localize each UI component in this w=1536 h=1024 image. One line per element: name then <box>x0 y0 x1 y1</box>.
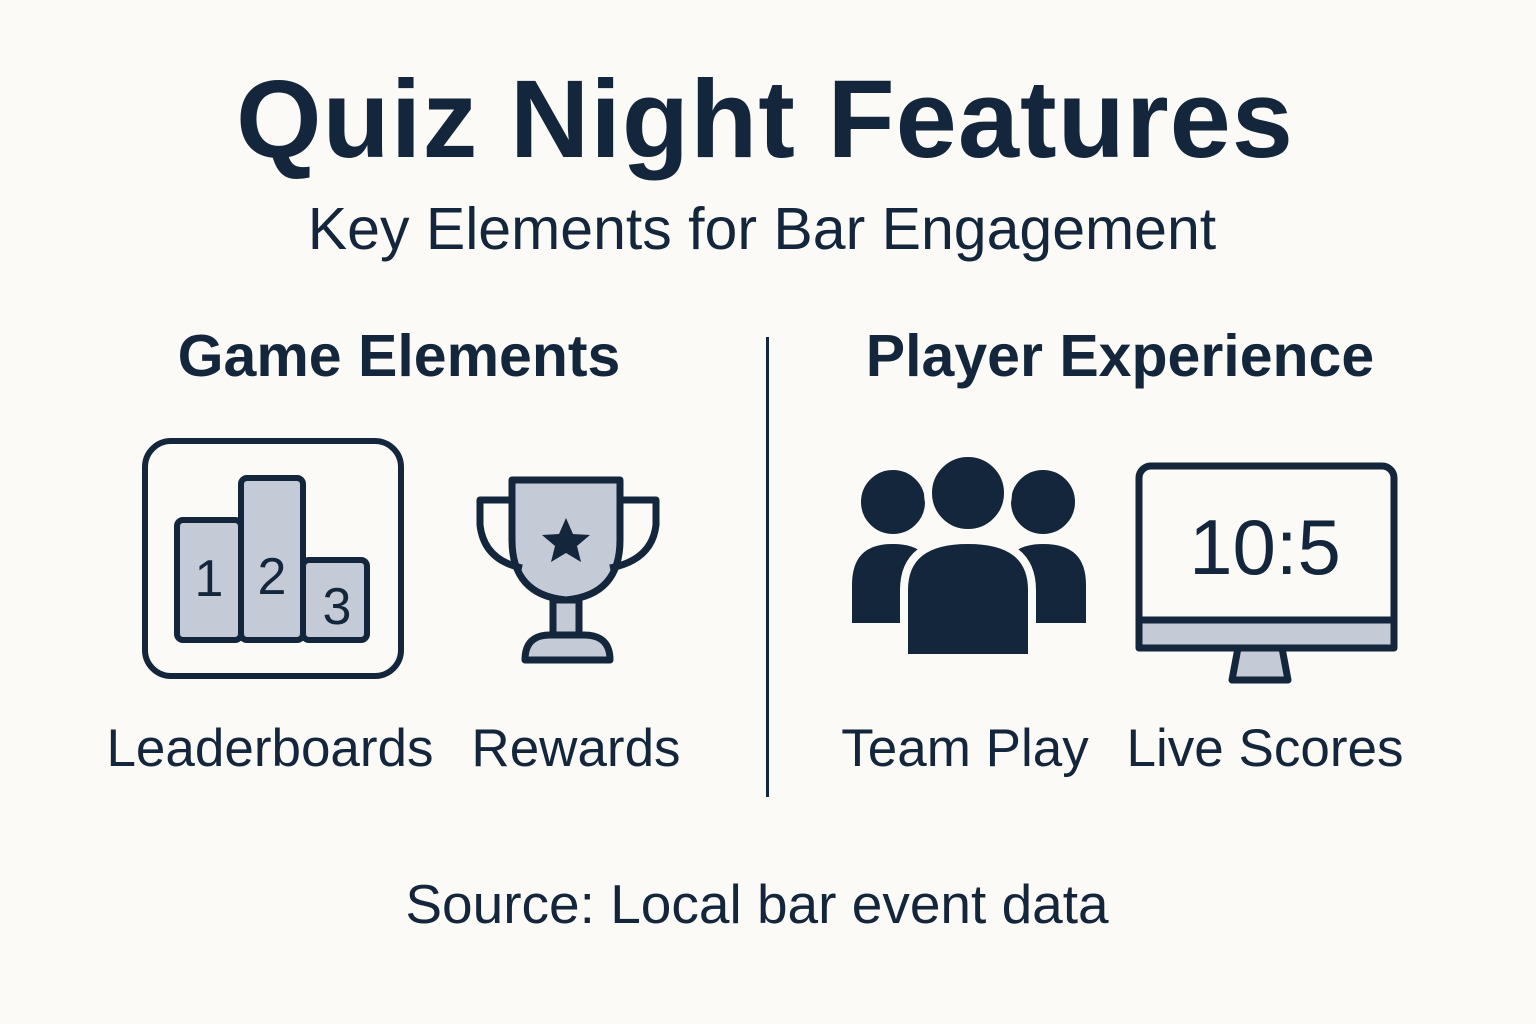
label: rewards: Rewards <box>471 719 681 778</box>
heading: game elements: Game Elements <box>178 323 620 389</box>
label: leaderboards: Leaderboards <box>106 719 434 778</box>
icon: leaderboard podium: 3 <box>323 578 351 636</box>
title: Quiz Night Features <box>236 58 1294 181</box>
source note: Source: Local bar event data <box>405 873 1109 935</box>
icon: scoreboard monitor: 10:5 <box>1189 503 1341 591</box>
icon: leaderboard podium: 2 <box>258 548 286 606</box>
heading: player experience: Player Experience <box>866 323 1374 389</box>
label: live scores: Live Scores <box>1127 719 1403 778</box>
icon: leaderboard podium: 1 <box>195 550 223 608</box>
subtitle: Key Elements for Bar Engagement <box>308 196 1216 262</box>
divider <box>766 337 769 797</box>
label: team play: Team Play <box>841 719 1089 778</box>
